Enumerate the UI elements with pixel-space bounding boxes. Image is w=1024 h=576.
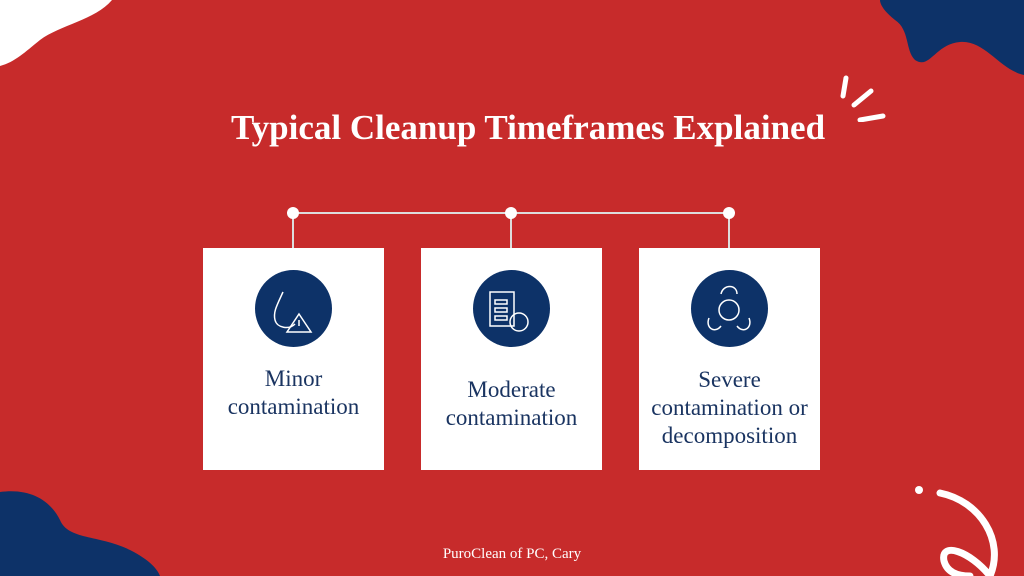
icon: clipboard gauge — [473, 270, 550, 347]
label — [228, 366, 359, 419]
panel: moderate — [421, 248, 602, 470]
label: contamination — [228, 394, 359, 419]
label — [651, 367, 808, 448]
connector lines — [287, 207, 735, 248]
icon: sparkle marks — [840, 76, 886, 122]
label: Moderate — [467, 377, 556, 402]
label: Severe — [698, 367, 761, 392]
panel: minor — [203, 248, 384, 470]
icon: swirl — [915, 486, 998, 576]
label: decomposition — [662, 423, 797, 448]
label: contamination or — [651, 395, 808, 420]
label — [446, 377, 577, 430]
icon: drop warning — [255, 270, 332, 347]
icon: biohazard leaves — [691, 270, 768, 347]
label: contamination — [446, 405, 577, 430]
label: Minor — [265, 366, 322, 391]
footer: PuroClean of PC, Cary — [443, 546, 581, 562]
panel: severe — [639, 248, 820, 470]
title: Typical Cleanup Timeframes Explained — [231, 108, 825, 147]
